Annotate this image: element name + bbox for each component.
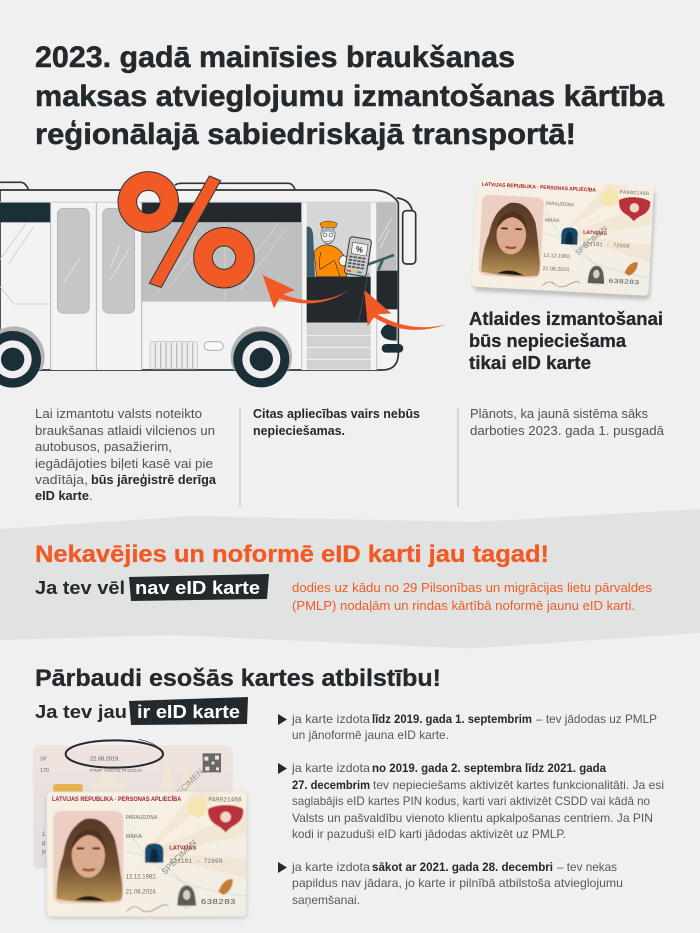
back of card: 1 (42, 832, 46, 838)
rule 2 (278, 761, 664, 841)
illustration: bus with conductor and percent sign (0, 172, 447, 388)
windscreen (367, 203, 397, 309)
ID card photo: top right: LATVIJAS REPUBLIKA · PERSONAS APLIECĪBA (482, 181, 596, 194)
column 1: text: iegādājoties biļeti kasē vai pie (35, 456, 213, 471)
column 1: text (35, 406, 217, 503)
rule 2: 27. decembrim (292, 778, 370, 792)
callout: eID card only: tikai eID karte (469, 353, 591, 373)
column 1: text: eID karte (35, 488, 89, 503)
front door (302, 203, 377, 370)
front of card: LATVIJAS (169, 846, 196, 852)
column 3: text (470, 406, 665, 438)
column 1: text: braukšanas atlaidi vilcienos un (35, 423, 215, 438)
column 1: text: vadītāja, (35, 472, 88, 487)
back of card: P (42, 851, 46, 857)
vent and fuel cap (150, 342, 223, 369)
band body text: dodies uz kādu no 29 Pilsonības un migrācijas lietu pārvaldes (292, 581, 652, 595)
conductor (307, 221, 372, 277)
ID card photo: top right: PA9921466 (620, 190, 649, 197)
back of card: SF (40, 757, 48, 763)
ID card photo: top right: PARAUDZIŅA (546, 201, 575, 208)
ID card photo: top right: MĀRA (545, 217, 560, 224)
main window (142, 203, 302, 222)
arrow to percent (263, 275, 350, 308)
column 1: text: . (89, 488, 93, 503)
conductor: % (355, 245, 364, 255)
title: maksas atvieglojumu izmantošanas kārtība (35, 80, 664, 113)
doors (51, 203, 142, 370)
arrow to door (364, 290, 447, 330)
bus roof vents (0, 182, 295, 189)
headlight and bumper (381, 323, 403, 353)
band heading: Nekavējies un noformē eID karti jau tagad! (35, 541, 549, 568)
ID card photo: top right: 12.12.1982. (543, 253, 571, 260)
column 2: text: Citas apliecības vairs nebūs (253, 406, 420, 421)
rule 2: no 2019. gada 2. septembra līdz 2021. gada (372, 761, 606, 775)
back of card (33, 746, 233, 868)
front of card: MĀRA (126, 833, 142, 840)
label: no eID card (129, 574, 269, 601)
front of card: 321181 - 72698 (169, 857, 223, 865)
rule 2: Valsts un pašvaldību vienoto klientu apkalpošanas centriem. Ja PIN (292, 811, 653, 825)
panel: get an eID card now (0, 509, 700, 648)
rule 1: un jānoformē jauna eID karte. (292, 728, 449, 742)
callout: eID card only: būs nepieciešama (469, 331, 627, 351)
rule 3 (278, 860, 623, 907)
rear window (0, 203, 51, 222)
band body text (292, 581, 652, 613)
mirror (397, 198, 416, 264)
ID card photo: top right: 21.08.2024. (542, 266, 571, 273)
back of card: PIMP YHDYS PHOOJA (90, 768, 143, 774)
front of card: SPECIMEN (159, 837, 198, 876)
band subheading: Ja tev vēl (35, 578, 125, 598)
rule 3: saņemšanai. (292, 893, 360, 907)
back of card: SPECIMEN (166, 767, 205, 806)
column 2: text: nepieciešamas. (253, 423, 345, 438)
rule 1 (278, 712, 657, 742)
rule 2: tev nepieciešams aktivizēt kartes funkcionalitāti. Ja esi (373, 778, 664, 792)
back of card: 22.08.2019. (90, 757, 120, 763)
ID card photo: top right (471, 177, 656, 300)
front of card: 638283 (201, 899, 236, 907)
callout: eID card only: Atlaides izmantošanai (469, 309, 663, 329)
rule 2: kodi ir pazuduši eID karti jādodas aktivizēt uz PMLP. (292, 827, 566, 841)
front wheel (231, 326, 292, 388)
ID cards: front and back with date circled (33, 739, 247, 918)
rule 2: ja karte izdota (291, 761, 370, 775)
rule 3: papildus nav jādara, jo karte ir pilnībā atbilstoša atvieglojumu (292, 876, 623, 890)
section heading: Pārbaudi esošās kartes atbilstību! (35, 665, 441, 692)
rule 3: – tev nekas (557, 860, 617, 874)
rule 1: – tev jādodas uz PMLP (536, 712, 657, 726)
front of card: LATVIJAS REPUBLIKA · PERSONAS APLIECĪBA (52, 796, 182, 803)
percent sign (118, 172, 254, 288)
front of card: 12.12.1982. (126, 874, 158, 880)
bus body (0, 190, 398, 370)
ID card photo: top right: 321181 - 72698 (582, 240, 630, 250)
front of card: PA9921466 (208, 797, 242, 804)
subheading: Ja tev jau (35, 702, 127, 722)
rule 1: līdz 2019. gada 1. septembrim (372, 712, 532, 726)
rule 2: saglabājis eID kartes PIN kodus, karti vari aktivizēt CSDD vai kādā no (292, 794, 650, 808)
front of card (47, 792, 247, 918)
band body text: (PMLP) nodaļām un rindas kārtībā noformē jaunu eID karti. (292, 599, 635, 613)
front of card: PARAUDZIŅA (126, 815, 158, 821)
circled issue date (66, 739, 163, 768)
front of card: 21.08.2024. (126, 889, 158, 895)
column 1: text: Lai izmantotu valsts noteikto (35, 406, 202, 421)
list: card issue date rules (278, 712, 664, 907)
back of card: 8 (42, 841, 46, 847)
back of card: 170 (40, 768, 49, 774)
ID card photo: top right: 638283 (608, 278, 640, 286)
column 3: text: Plānots, ka jaunā sistēma sāks (470, 406, 648, 421)
column 2: text (253, 406, 420, 438)
label: no eID card: nav eID karte (135, 578, 260, 598)
column 1: text: autobusos, pasažierim, (35, 439, 172, 454)
column 1: text: būs jāreģistrē derīga (91, 472, 217, 487)
ID card photo: top right: SPECIMEN (573, 224, 609, 257)
title: reģionālajā sabiedriskajā transportā! (35, 118, 576, 151)
column 3: text: darboties 2023. gada 1. pusgadā (470, 423, 665, 438)
label: has eID card: ir eID karte (137, 702, 240, 722)
rule 3: sākot ar 2021. gada 28. decembri (372, 860, 553, 874)
rule 1: ja karte izdota (291, 712, 370, 726)
rear wheel (0, 326, 45, 388)
title: 2023. gadā mainīsies braukšanas (35, 41, 515, 74)
title (35, 41, 664, 151)
label: has eID card (129, 697, 248, 725)
ID card photo: top right: LATVIJAS (583, 230, 608, 237)
callout: eID card only (469, 309, 663, 373)
rule 3: ja karte izdota (291, 860, 370, 874)
